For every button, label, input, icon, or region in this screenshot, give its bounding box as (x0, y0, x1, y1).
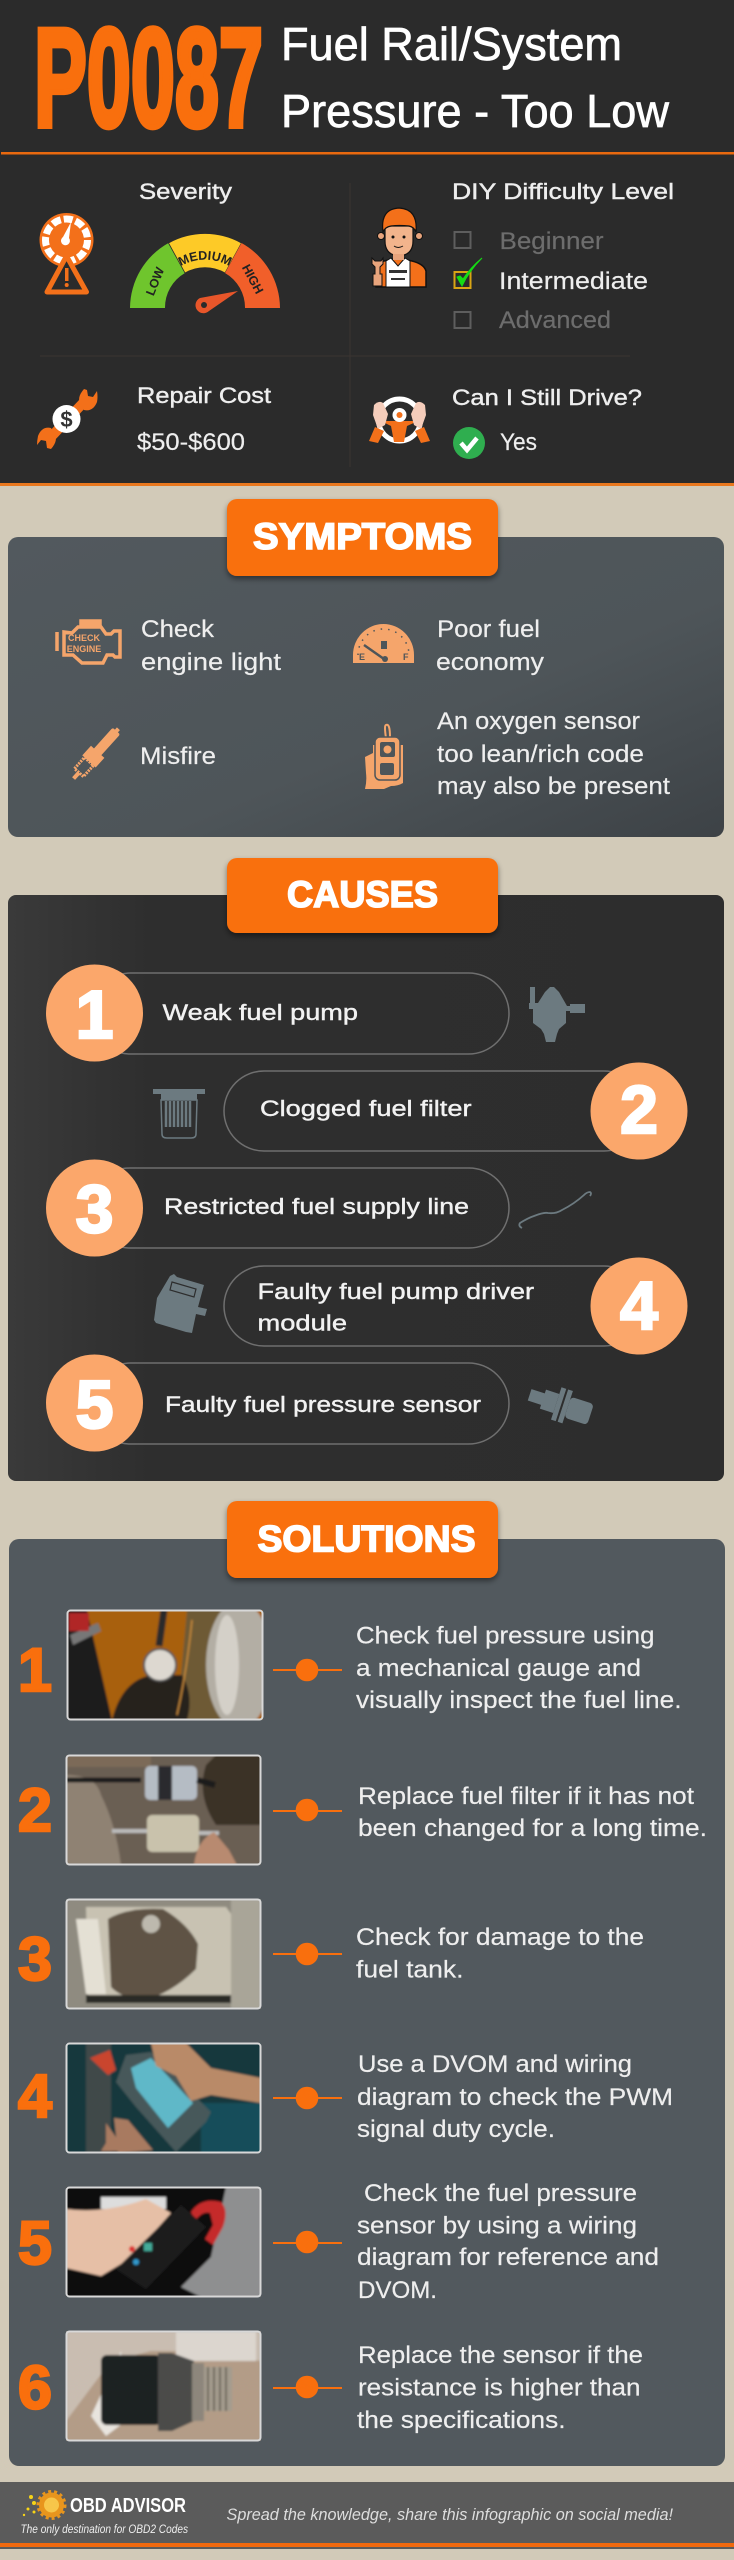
text: poor fuel economy: Poor fuel (437, 616, 540, 643)
checklist: difficulty options: Beginner (500, 228, 604, 255)
panel: causes (8, 858, 724, 1481)
text: poor fuel economy: economy (436, 649, 544, 676)
text: Check fuel pressure using (356, 1622, 654, 1650)
logo (20, 2492, 188, 2536)
text: resistance is higher than (358, 2374, 640, 2402)
icon: check engine (57, 621, 120, 663)
cause 3 (46, 1160, 509, 1256)
cause 2: Clogged fuel filter (260, 1096, 472, 1121)
cause 1: Weak fuel pump (162, 1000, 358, 1025)
logo: The only destination for OBD2 Codes (20, 2522, 188, 2536)
text: oxygen sensor code: too lean/rich code (437, 741, 644, 768)
icon: fuel gauge: F (403, 652, 409, 662)
connector (273, 1659, 342, 1681)
title: Fuel Rail/System (281, 18, 622, 70)
cause 2: 2 (620, 1072, 658, 1148)
checklist: difficulty options (454, 228, 648, 334)
heading: can I still drive: Can I Still Drive? (452, 385, 642, 410)
text: visually inspect the fuel line. (356, 1687, 682, 1714)
photo: scan tool tablet (66, 2043, 261, 2153)
photo: fuel tank (66, 1899, 261, 2009)
solution 1: 1 (18, 1636, 52, 1704)
heading: symptoms: SYMPTOMS (253, 516, 472, 557)
heading: repair cost: Repair Cost (137, 383, 271, 408)
cause 5: Faulty fuel pressure sensor (165, 1392, 481, 1417)
icon: repair cost wrench: $ (60, 407, 73, 432)
panel: solutions (9, 1501, 725, 2466)
photo: fuel pressure gauge (67, 1610, 263, 1720)
footer (0, 2482, 734, 2549)
cause 4: module (258, 1310, 347, 1336)
cause 1: 1 (76, 977, 113, 1053)
cause 3: Restricted fuel supply line (164, 1194, 469, 1219)
heading: severity: Severity (139, 179, 232, 204)
solution 4 (18, 2043, 673, 2153)
cause 1 (46, 964, 509, 1062)
value: repair cost: $50-$600 (137, 429, 245, 456)
cause 4 (224, 1258, 688, 1354)
cause 2 (224, 1062, 688, 1160)
heading: causes: CAUSES (287, 874, 438, 915)
text (357, 2180, 659, 2304)
text (357, 2051, 673, 2143)
heading: solutions (227, 1501, 498, 1578)
connector (273, 2087, 342, 2109)
solution 6: 6 (18, 2354, 52, 2422)
text: check engine light (141, 616, 281, 676)
text: Check for damage to the (356, 1924, 644, 1951)
chart: severity gauge: MEDIUM (178, 251, 232, 266)
heading: causes (227, 858, 498, 933)
cause 5: 5 (76, 1367, 113, 1443)
icon: steering wheel (369, 399, 430, 443)
icon: fuel gauge (353, 624, 414, 663)
solution 2: 2 (18, 1776, 52, 1844)
text: signal duty cycle. (357, 2116, 555, 2143)
solution 3 (18, 1899, 644, 2009)
text: fuel tank. (356, 1956, 464, 1984)
icon: fuel line (519, 1192, 591, 1228)
icon: driver module (154, 1274, 207, 1333)
chart: severity gauge: LOW (143, 265, 167, 298)
connector (273, 1943, 342, 1965)
icon: pressure sensor (524, 1379, 596, 1431)
checklist: difficulty options: Advanced (499, 307, 611, 334)
icon: check engine: CHECK (68, 633, 100, 643)
text: DVOM. (358, 2277, 437, 2304)
text: Use a DVOM and wiring (358, 2051, 632, 2078)
icon: OBD scanner (365, 725, 403, 789)
text (356, 1622, 682, 1714)
text (358, 1783, 707, 1842)
cause 4: Faulty fuel pump driver (258, 1279, 534, 1304)
text: the specifications. (357, 2407, 566, 2434)
solution 1 (18, 1601, 682, 1729)
solution 5: 5 (18, 2209, 52, 2277)
footer message: Spread the knowledge, share this infographic on social media! (226, 2505, 673, 2524)
logo: OBD ADVISOR (70, 2495, 186, 2517)
icon: mechanic (372, 208, 426, 287)
icon: fuel filter (153, 1089, 205, 1138)
photo: multimeter (66, 2187, 261, 2297)
text: sensor by using a wiring (357, 2212, 637, 2240)
text: diagram to check the PWM (357, 2084, 673, 2111)
chart: severity gauge: HIGH (239, 262, 266, 296)
photo: fuel filters (66, 1755, 261, 1865)
heading: DIY difficulty level: DIY Difficulty Level (452, 179, 674, 204)
text: misfire: Misfire (140, 743, 216, 770)
solution 4: 4 (18, 2062, 52, 2130)
gauge needle (195, 291, 238, 313)
icon: fuel gauge: E (359, 652, 365, 662)
text: oxygen sensor code: An oxygen sensor (437, 708, 640, 735)
icon: spark plug (67, 723, 125, 785)
solution 6 (18, 2331, 643, 2441)
solution 5 (18, 2180, 659, 2304)
text: oxygen sensor code: may also be present (437, 773, 670, 800)
checklist: difficulty options: Intermediate (499, 268, 648, 295)
text (356, 1924, 644, 1984)
title (281, 18, 670, 137)
icon: check engine: ENGINE (67, 644, 101, 654)
value: yes: Yes (500, 429, 537, 456)
icon: green check (453, 427, 485, 459)
solution 3: 3 (18, 1925, 52, 1993)
text: oxygen sensor code (437, 708, 670, 800)
connector (273, 1799, 342, 1821)
text: poor fuel economy (436, 616, 544, 676)
code title: P0087 (34, 0, 263, 156)
text: check engine light: Check (141, 616, 215, 643)
chart: severity gauge (130, 234, 280, 314)
text: a mechanical gauge and (356, 1655, 641, 1682)
text: Replace fuel filter if it has not (358, 1783, 694, 1810)
photo: pressure sensor (66, 2331, 261, 2441)
heading: symptoms (227, 499, 498, 576)
cause 4: 4 (620, 1268, 658, 1344)
cause 5 (46, 1354, 509, 1452)
text: diagram for reference and (357, 2244, 659, 2271)
connector (273, 2376, 342, 2398)
text: Check the fuel pressure (364, 2180, 637, 2207)
connector (273, 2231, 342, 2253)
text: check engine light: engine light (141, 649, 281, 676)
icon: severity gauge warning (40, 213, 94, 292)
heading: solutions: SOLUTIONS (258, 1518, 476, 1560)
title: Pressure - Too Low (281, 85, 670, 137)
panel: header (0, 0, 734, 486)
icon: fuel pump (529, 987, 585, 1042)
text: Replace the sensor if the (358, 2342, 643, 2369)
solution 2 (18, 1755, 707, 1865)
panel: symptoms (8, 499, 724, 837)
icon: repair cost wrench (37, 389, 98, 449)
text (357, 2342, 643, 2434)
cause 3: 3 (76, 1171, 113, 1247)
text: been changed for a long time. (358, 1815, 707, 1842)
